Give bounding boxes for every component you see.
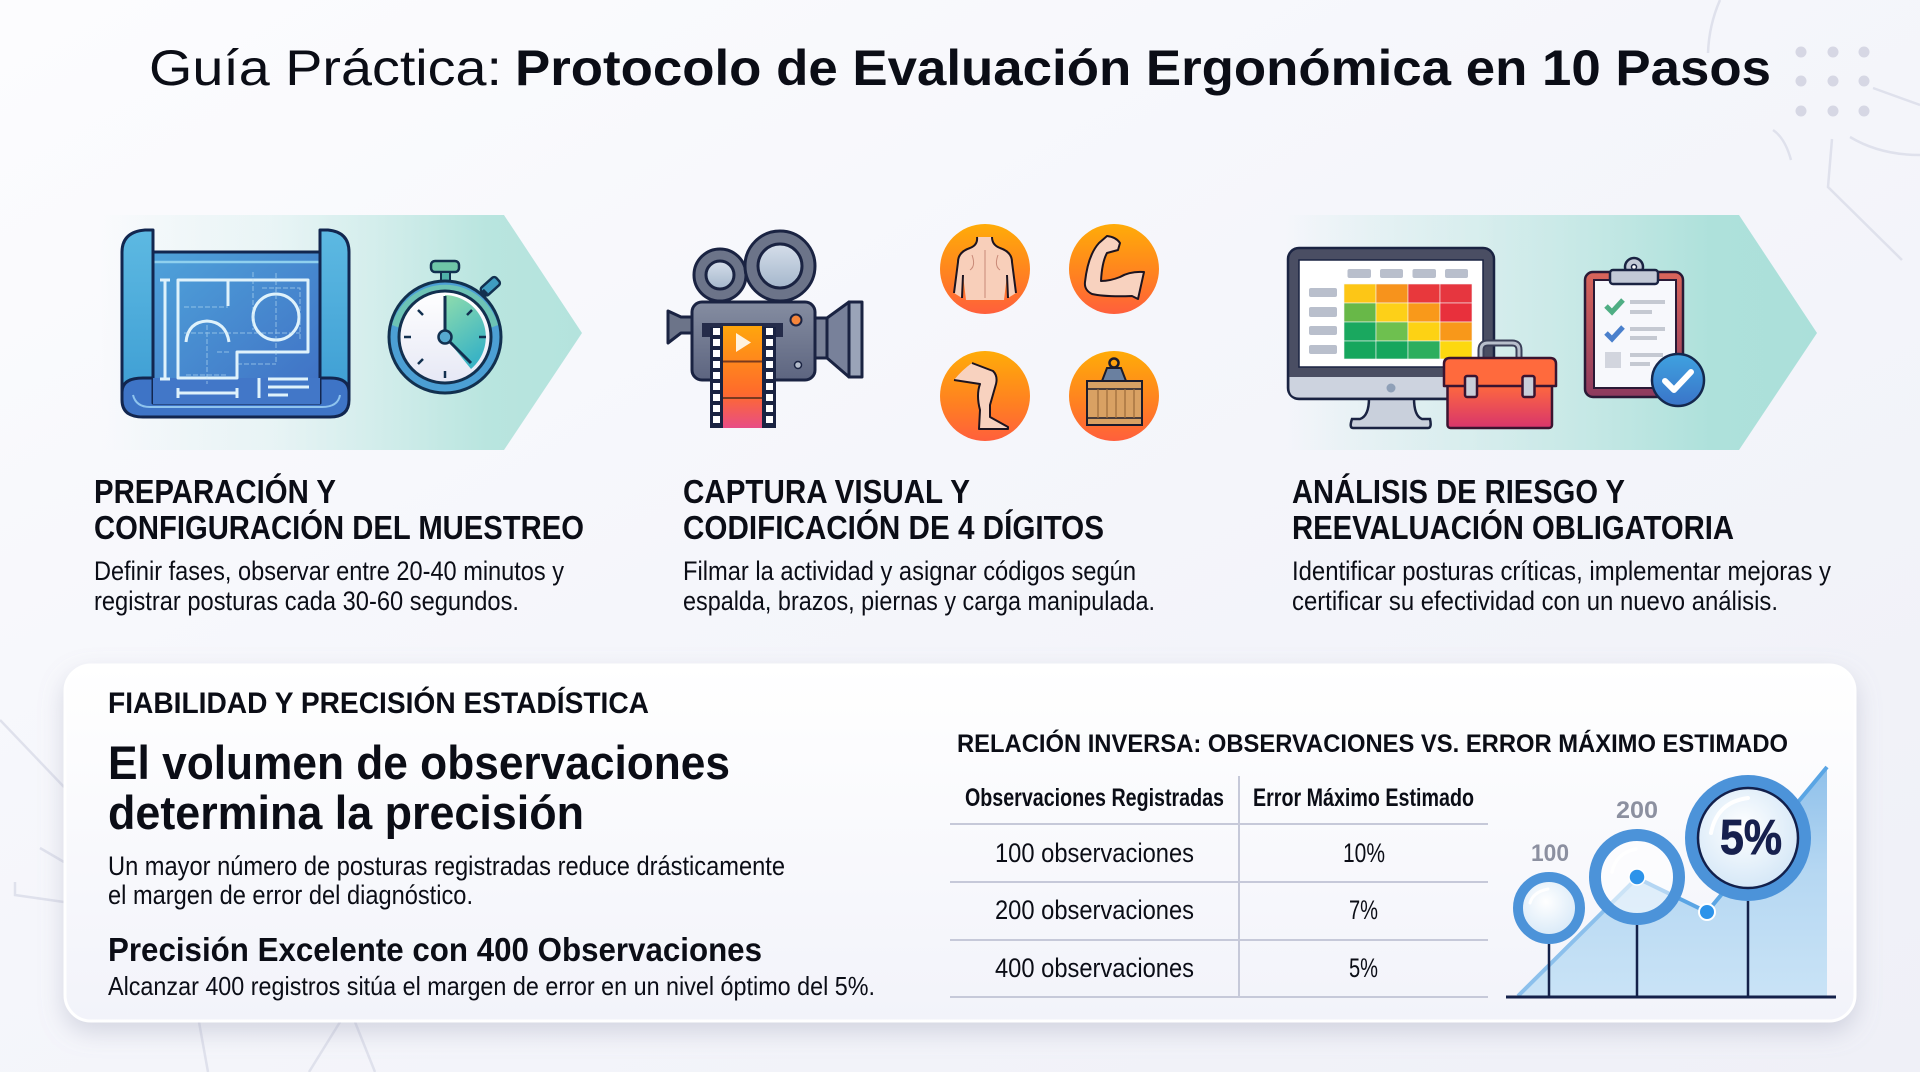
arrow band: step 1 <box>100 215 582 450</box>
table: observations vs error: Observaciones Registradas <box>965 784 1224 812</box>
chart label: 5%: 5% <box>1720 811 1782 865</box>
table: observations vs error <box>950 776 1488 997</box>
step 2 heading: CAPTURA VISUAL Y <box>683 473 970 510</box>
step 1 description <box>94 556 564 616</box>
callout: excellent precision <box>108 931 875 1001</box>
table: observations vs error: 400 observaciones <box>995 953 1194 983</box>
step 3 description: Identificar posturas críticas, implementar mejoras y <box>1292 556 1831 586</box>
icon: toolbox <box>1444 343 1556 428</box>
decorative dot grid <box>1796 46 1870 116</box>
step 2 description: Filmar la actividad y asignar códigos según <box>683 556 1136 586</box>
table: observations vs error: 200 observaciones <box>995 895 1194 925</box>
icon: film camera <box>668 231 862 428</box>
step 1 description: registrar posturas cada 30-60 segundos. <box>94 586 519 616</box>
step 2 description <box>683 556 1155 616</box>
panel description <box>108 851 785 910</box>
panel description: el margen de error del diagnóstico. <box>108 880 473 910</box>
icon: back <box>940 224 1030 314</box>
table: observations vs error: 10% <box>1343 838 1385 868</box>
step 1 heading <box>94 473 584 546</box>
step 3 description: certificar su efectividad con un nuevo análisis. <box>1292 586 1778 616</box>
step 2 heading: CODIFICACIÓN DE 4 DÍGITOS <box>683 509 1104 546</box>
step 3 heading: REEVALUACIÓN OBLIGATORIA <box>1292 509 1734 546</box>
step 2 heading <box>683 473 1104 546</box>
step 1 description: Definir fases, observar entre 20-40 minutos y <box>94 556 564 586</box>
icon: blueprint <box>122 230 349 417</box>
panel heading: determina la precisión <box>108 786 584 839</box>
chart: error lens graphic <box>1506 767 1836 997</box>
icon: clipboard checklist <box>1585 258 1704 406</box>
title: Protocolo de Evaluación Ergonómica en 10 Pasos <box>515 40 1771 96</box>
panel: reliability and statistical precision <box>65 665 1855 1021</box>
icon: risk monitor <box>1288 248 1494 428</box>
icon: stopwatch <box>389 261 501 393</box>
step 3 heading: ANÁLISIS DE RIESGO Y <box>1292 473 1625 510</box>
panel heading: El volumen de observaciones <box>108 736 730 789</box>
chart label: 200: 200 <box>1616 797 1658 824</box>
table: observations vs error: Error Máximo Estimado <box>1253 784 1474 812</box>
panel description: Un mayor número de posturas registradas reduce drásticamente <box>108 851 785 881</box>
chart label: 100: 100 <box>1531 840 1569 867</box>
step 1 heading: CONFIGURACIÓN DEL MUESTREO <box>94 509 584 546</box>
title: Guía Práctica: <box>149 40 502 96</box>
step 1 heading: PREPARACIÓN Y <box>94 473 336 510</box>
table: observations vs error: 7% <box>1349 895 1378 925</box>
panel heading <box>108 736 730 839</box>
callout: excellent precision: Precisión Excelente con 400 Observaciones <box>108 931 762 968</box>
table: observations vs error: 5% <box>1349 953 1378 983</box>
callout: excellent precision: Alcanzar 400 registros sitúa el margen de error en un nivel óptimo del 5%. <box>108 971 875 1001</box>
icon: leg <box>940 351 1030 441</box>
step 3 heading <box>1292 473 1734 546</box>
panel eyebrow: FIABILIDAD Y PRECISIÓN ESTADÍSTICA <box>108 686 649 720</box>
step 2 description: espalda, brazos, piernas y carga manipulada. <box>683 586 1155 616</box>
chart heading: RELACIÓN INVERSA: OBSERVACIONES VS. ERROR MÁXIMO ESTIMADO <box>957 728 1788 758</box>
icon: arm <box>1069 224 1159 314</box>
arrow band: step 3 <box>1285 215 1817 450</box>
icon: load crate <box>1069 351 1159 441</box>
table: observations vs error: 100 observaciones <box>995 838 1194 868</box>
step 3 description <box>1292 556 1831 616</box>
